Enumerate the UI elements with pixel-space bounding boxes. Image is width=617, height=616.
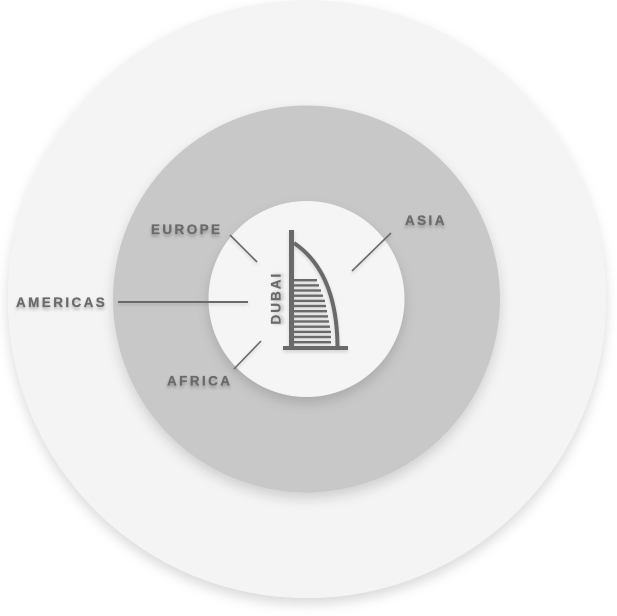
label: Dubai: DUBAI bbox=[268, 272, 284, 324]
icon: Burj Al Arab tower bbox=[283, 230, 348, 350]
middle circle: regions bbox=[113, 106, 500, 492]
label: Europe: EUROPE bbox=[151, 222, 222, 237]
connector lines to regions bbox=[118, 233, 391, 369]
label: Americas: AMERICAS bbox=[16, 295, 107, 310]
label: Asia: ASIA bbox=[405, 213, 447, 228]
label: Africa: AFRICA bbox=[167, 374, 232, 388]
inner circle: Dubai bbox=[208, 201, 404, 397]
